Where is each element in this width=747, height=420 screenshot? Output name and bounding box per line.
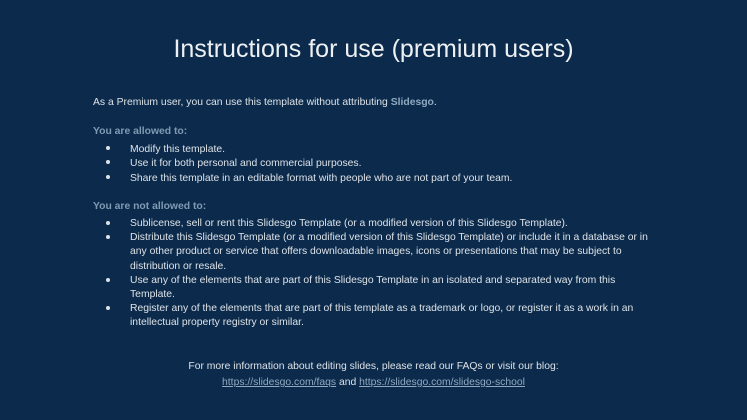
list: allowed: [106, 144, 512, 184]
list: not allowed: Template.: [130, 289, 175, 300]
footer text: For more information about editing slides, please read our FAQs or visit our blog:: [188, 361, 559, 372]
list: allowed: Share this template in an editable format with people who are not part of your team.: [130, 173, 512, 184]
list: not allowed: Sublicense, sell or rent this Slidesgo Template (or a modified version of this Slidesgo Template).: [130, 218, 568, 229]
list: not allowed: Register any of the elements that are part of this template as a trademark or logo, or register it as a work in an: [130, 303, 633, 314]
list: not allowed: Distribute this Slidesgo Template (or a modified version of this Slidesgo Template) or include it in a database or in: [130, 232, 648, 243]
list: not allowed: any other product or service that offers downloadable images, icons or presentations that may be subject to: [130, 246, 622, 257]
heading: allowed: You are allowed to:: [93, 126, 187, 137]
list: not allowed: [106, 218, 648, 328]
heading: not allowed: You are not allowed to:: [93, 201, 206, 212]
list: allowed: Use it for both personal and commercial purposes.: [130, 158, 361, 169]
list: not allowed: intellectual property registry or similar.: [130, 317, 304, 328]
title: Instructions for use (premium users): [173, 35, 574, 63]
list: not allowed: distribution or resale.: [130, 261, 226, 272]
list: allowed: Modify this template.: [130, 144, 225, 155]
list: not allowed: Use any of the elements that are part of this Slidesgo Template in an isolated and separated way from this: [130, 275, 615, 286]
footer links: https://slidesgo.com/faqs and https://slidesgo.com/slidesgo-school: [222, 377, 525, 388]
intro text: As a Premium user, you can use this template without attributing Slidesgo.: [93, 97, 437, 108]
